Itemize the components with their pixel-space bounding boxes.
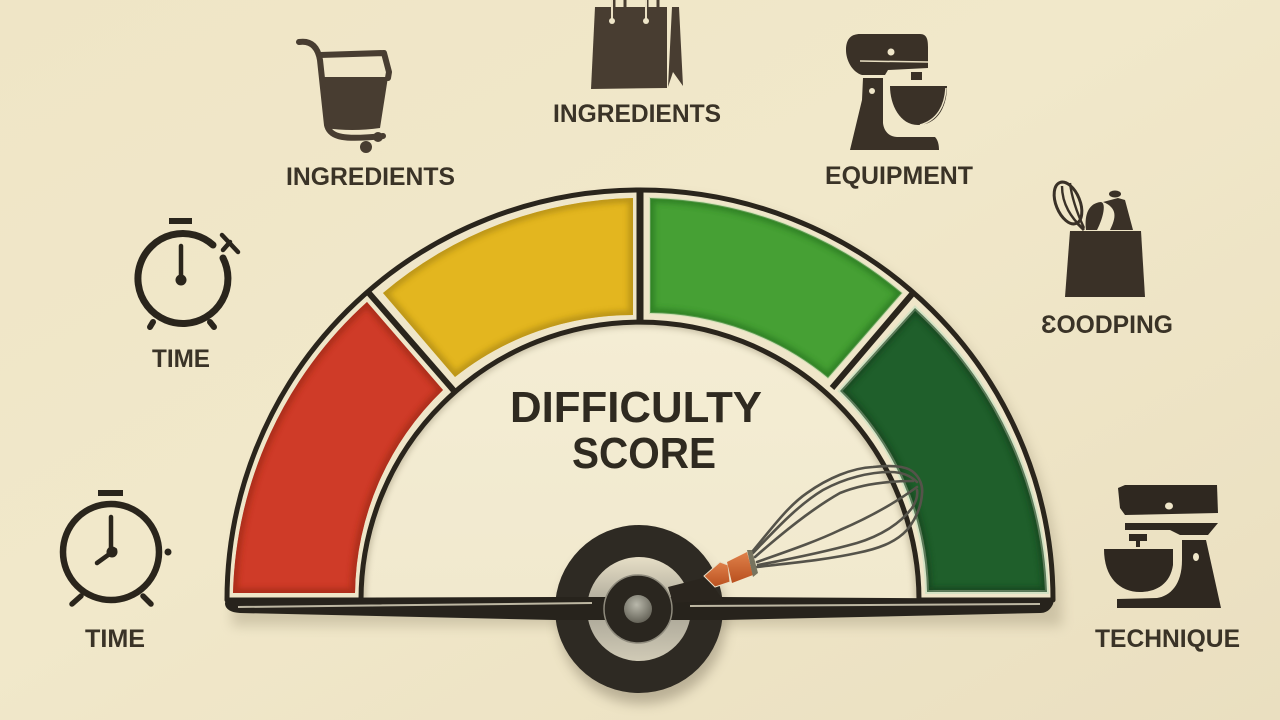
label: shopping: ƐOODPING bbox=[1041, 311, 1173, 339]
label: technique: TECHNIQUE bbox=[1095, 625, 1240, 653]
gauge: difficulty meter bbox=[227, 190, 1062, 626]
label: equipment: EQUIPMENT bbox=[825, 162, 973, 190]
icon: shopping bag bbox=[591, 0, 683, 89]
needle bar bbox=[225, 597, 1053, 620]
whisk needle bbox=[668, 466, 922, 603]
icon group: equipment bbox=[825, 34, 973, 190]
title: difficulty score: DIFFICULTY bbox=[510, 383, 762, 432]
icon: shopping cart bbox=[299, 42, 389, 153]
segment: red bbox=[233, 302, 443, 593]
label: time lower: TIME bbox=[85, 625, 145, 653]
label: ingredients left: INGREDIENTS bbox=[286, 163, 455, 191]
icon group: shopping bbox=[1041, 178, 1173, 339]
icon: stand mixer bbox=[846, 34, 947, 150]
hub knob bbox=[624, 595, 652, 623]
label: ingredients top: INGREDIENTS bbox=[553, 100, 721, 128]
hub and needle bbox=[225, 525, 1053, 704]
segment: light green bbox=[650, 198, 902, 378]
icon group: technique bbox=[1095, 485, 1240, 653]
segment: dark green bbox=[840, 308, 1047, 592]
whisk handle bbox=[704, 550, 758, 587]
icon: alarm clock lower bbox=[63, 490, 172, 604]
title: difficulty score bbox=[510, 383, 762, 478]
segment: yellow bbox=[383, 198, 633, 377]
gauge frame bbox=[227, 190, 1053, 600]
icon: stand mixer right bbox=[1104, 485, 1221, 608]
icon group: time (lower) bbox=[63, 490, 172, 653]
title: difficulty score: SCORE bbox=[572, 429, 716, 478]
icon: grocery bag with whisk bbox=[1049, 178, 1145, 297]
icon group: time (upper) bbox=[138, 218, 238, 373]
gauge inner panel bbox=[361, 322, 919, 600]
icon group: ingredients cart bbox=[286, 42, 455, 191]
icon group: ingredients bag bbox=[553, 0, 721, 128]
label: time upper: TIME bbox=[152, 345, 210, 373]
icon: alarm clock upper bbox=[138, 218, 238, 327]
